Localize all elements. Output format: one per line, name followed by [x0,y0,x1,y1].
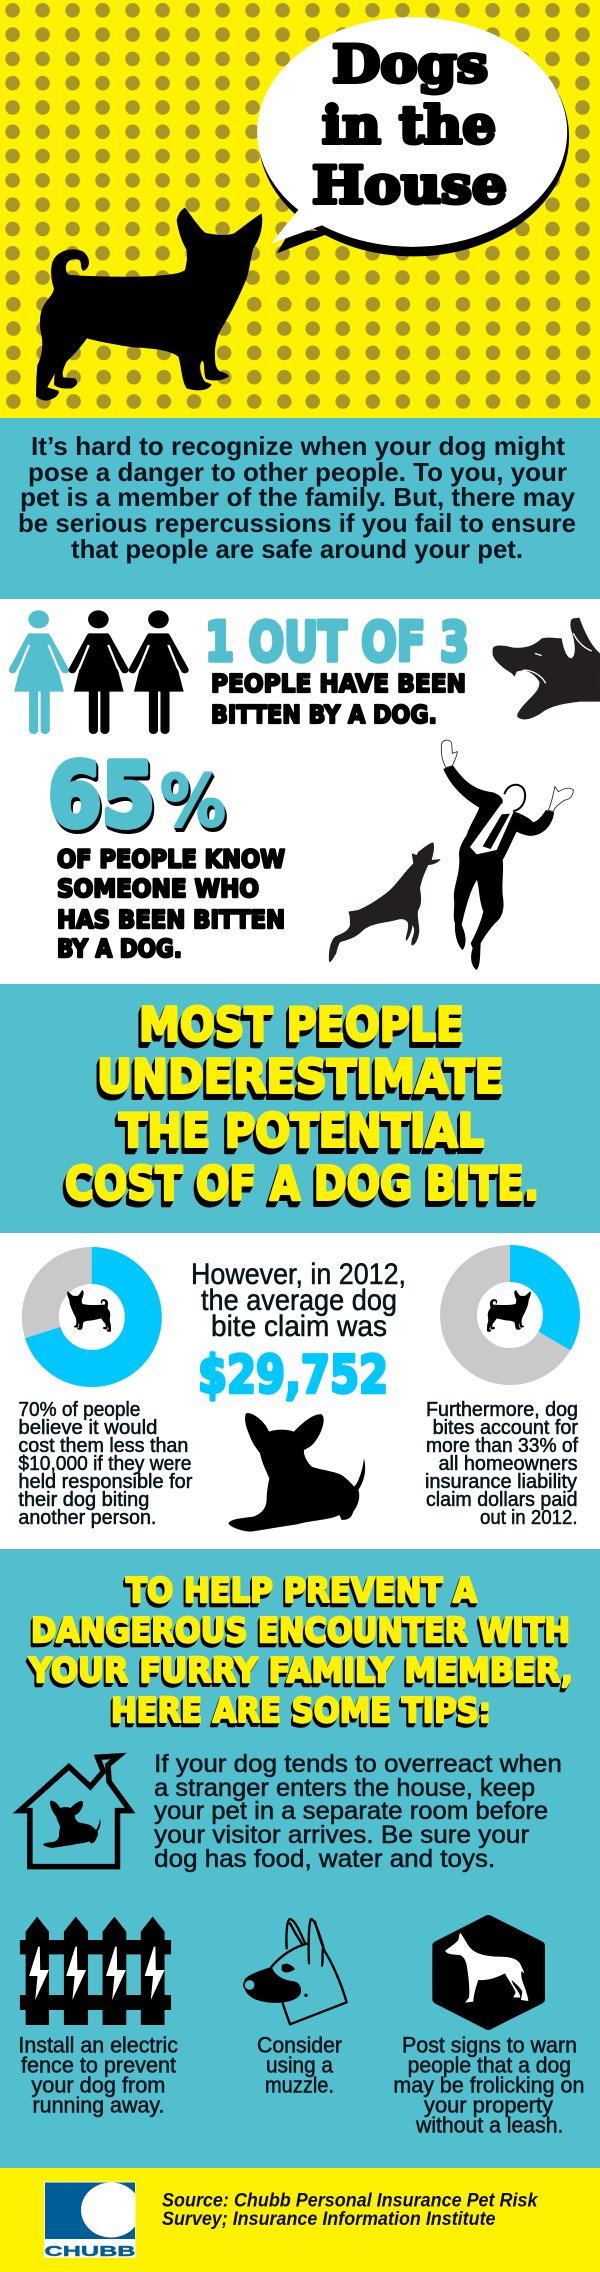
icon: standing dog silhouette [36,208,262,401]
intro text [18,431,576,564]
icon: small dog right [487,1290,531,1332]
panel: footer [0,2168,600,2272]
logo: Chubb [44,2182,141,2260]
panel: intro [0,418,600,599]
icon: electric fence [20,1917,171,2025]
text: homeowners claims: out in 2012. [480,1507,578,1529]
intro text: that people are safe around your pet. [71,534,523,564]
icon: snarling dog head [493,618,600,719]
text: 70 percent belief: cost them less than [18,1435,188,1457]
heading: underestimate the cost: MOST PEOPLE [139,998,464,1052]
text: keep pet separate: If your dog tends to overreact when [154,1750,562,1778]
text: muzzle tip: muzzle. [265,2073,334,2098]
text: homeowners claims: more than 33% of [426,1435,578,1457]
heading: underestimate the cost: UNDERESTIMATE [97,1050,504,1104]
heading: underestimate the cost: THE POTENTIAL [119,1104,484,1158]
source note: Survey; Insurance Information Institute [162,2208,496,2230]
icon: small dog left [67,1290,111,1332]
text: warning sign tip [393,2033,584,2138]
text: electric fence tip: fence to prevent [21,2053,176,2078]
stat: 65% [48,744,226,847]
text: average claim [191,1258,406,1343]
intro text: be serious repercussions if you fail to ensure [18,508,576,538]
icon: muzzled dog [244,1919,347,2024]
title: House [312,156,507,216]
text: 70 percent belief: their dog biting [18,1489,149,1511]
text: muzzle tip: using a [266,2053,334,2078]
icon: black person [72,610,125,734]
text: warning sign tip: Post signs to warn [402,2033,577,2058]
heading: underestimate the cost [65,998,539,1210]
heading: prevention tips: YOUR FURRY FAMILY MEMBER, [28,1651,573,1691]
stat: 65%: % [160,759,226,843]
icon: lying dog silhouette [228,1413,365,1532]
illustration: man chased by jumping dog [329,740,573,970]
text: 70 percent belief: held responsible for [18,1471,193,1493]
stat text: know someone bitten: SOMEONE WHO [57,874,259,903]
text: warning sign tip: people that a dog [408,2053,571,2078]
icon: three people, one highlighted [13,610,185,734]
stat text: people bitten: BITTEN BY A DOG. [211,700,437,729]
text: warning sign tip: may be frolicking on [393,2073,584,2098]
text: homeowners claims [425,1399,578,1529]
text: keep pet separate: dog has food, water and toys. [154,1845,495,1873]
text: electric fence tip: Install an electric [18,2033,178,2058]
donut chart: 70 percent [40,1266,143,1368]
title: in the [322,96,496,156]
text: electric fence tip: running away. [32,2093,164,2118]
text: average claim: However, in 2012, [191,1258,406,1291]
text: average claim: bite claim was [211,1310,387,1343]
source note [162,2190,539,2230]
panel: cost heading [0,984,600,1233]
text: keep pet separate: your pet in a separate room before [154,1797,548,1825]
title: Dogs [332,35,488,95]
panel: costs [0,1233,600,1549]
text: electric fence tip [18,2033,178,2118]
text: 70 percent belief: another person. [18,1507,156,1529]
icon: black person [132,610,185,734]
icon: warning sign with dog [437,1920,540,2025]
stat: 1 out of 3: 1 OUT OF 3 [205,610,469,674]
text: 70 percent belief [18,1399,193,1529]
text: average claim: the average dog [201,1284,397,1317]
stat text: know someone bitten [57,844,285,963]
text: 70 percent belief: $10,000 if they were [18,1453,191,1475]
text: warning sign tip: without a leash. [415,2113,563,2138]
stat: 65%: 65 [48,744,155,847]
text: electric fence tip: your dog from [31,2073,165,2098]
text: keep pet separate: your visitor arrives. Be sure your [154,1821,529,1849]
stat text: know someone bitten: HAS BEEN BITTEN [57,905,285,934]
text: keep pet separate [154,1750,562,1873]
text: homeowners claims: bites account for [433,1417,578,1439]
intro text: pose a danger to other people. To you, your [28,457,567,487]
intro text: It’s hard to recognize when your dog might [31,431,565,461]
logo: Chubb: CHUBB [44,2244,136,2260]
donut chart: 33 percent [458,1264,562,1366]
text: keep pet separate: a stranger enters the house, keep [154,1774,535,1802]
text: homeowners claims: claim dollars paid [426,1489,578,1511]
panel: yellow halftone header [0,0,600,418]
heading: prevention tips: HERE ARE SOME TIPS: [111,1691,491,1731]
icon: speech bubble [257,17,569,256]
icon: falling man [441,740,573,970]
heading: prevention tips [28,1571,573,1731]
text: homeowners claims: insurance liability [425,1471,577,1493]
panel: tips [0,1549,600,2168]
source note: Source: Chubb Personal Insurance Pet Risk [162,2190,539,2212]
text: 70 percent belief: believe it would [18,1417,157,1439]
text: homeowners claims: Furthermore, dog [426,1399,578,1421]
text: warning sign tip: your property [424,2093,553,2118]
intro text: pet is a member of the family. But, there may [20,482,576,512]
stat text: people bitten [211,669,466,729]
icon: teal person [13,610,65,734]
title [312,35,507,216]
stat text: people bitten: PEOPLE HAVE BEEN [211,669,466,698]
text: 70 percent belief: 70% of people [18,1399,140,1421]
heading: prevention tips: TO HELP PREVENT A [126,1571,478,1611]
stat: 29,752 dollars: $29,752 [198,1346,388,1406]
stat text: know someone bitten: OF PEOPLE KNOW [57,844,285,874]
text: muzzle tip [257,2033,342,2098]
icon: jumping dog [329,842,441,962]
stat text: know someone bitten: BY A DOG. [57,934,182,963]
icon: dog in house [20,1756,130,1867]
text: muzzle tip: Consider [257,2033,342,2058]
text: homeowners claims: all homeowners [438,1453,578,1475]
panel: statistics [0,599,600,984]
